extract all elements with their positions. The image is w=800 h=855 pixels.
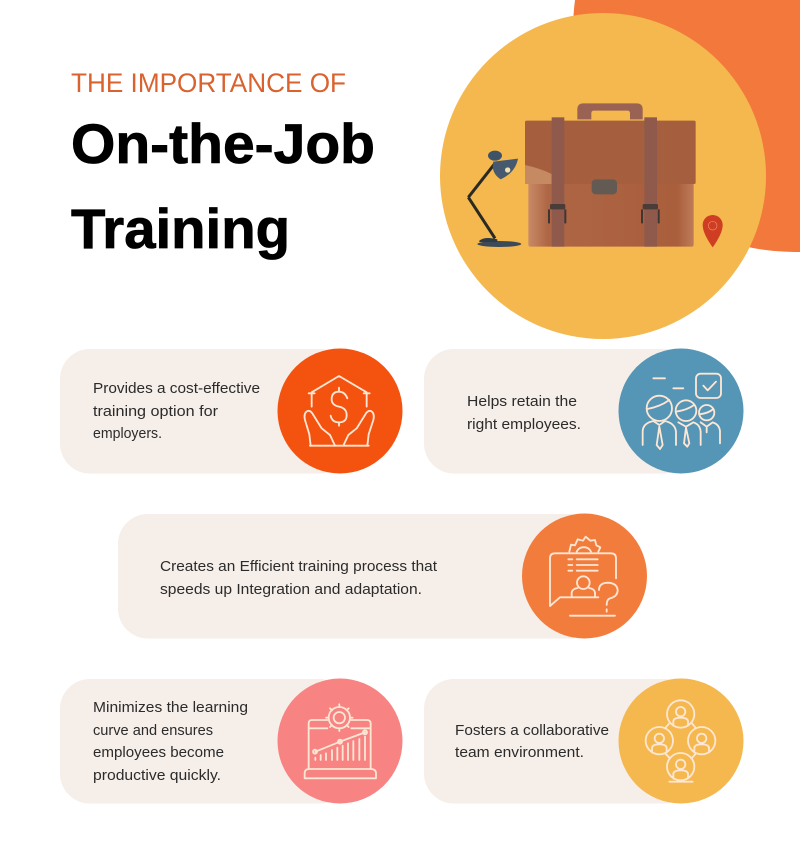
icon: speech bubble with person and question mark <box>550 537 618 616</box>
icon: map pin <box>703 215 723 247</box>
panel: retain employees <box>424 348 744 474</box>
text block <box>93 380 260 442</box>
main title line one: On-the-Job <box>71 112 375 175</box>
text block: right employees. <box>467 416 581 433</box>
text block: speeds up Integration and adaptation. <box>160 581 422 598</box>
text block: Minimizes the learning <box>93 699 248 716</box>
text block: Creates an Efficient training process that <box>160 558 438 575</box>
illustration: briefcase, lamp and pin <box>468 103 723 247</box>
decorative orange circle <box>573 0 800 252</box>
main title line two: Training <box>71 197 290 260</box>
text block <box>93 699 248 784</box>
yellow hero circle <box>440 13 766 339</box>
icon: desk lamp <box>468 151 521 247</box>
text block <box>455 722 609 761</box>
icon: hands and house <box>305 376 374 446</box>
text block: Helps retain the <box>467 393 577 410</box>
text block: employees become <box>93 744 224 761</box>
eyebrow: THE IMPORTANCE OF <box>71 68 346 98</box>
text block <box>160 558 438 598</box>
panel: cost-effective <box>60 348 402 474</box>
icon: briefcase <box>525 103 696 247</box>
text block: curve and ensures <box>93 722 213 739</box>
panel: collaborative team <box>424 678 744 804</box>
text block: training option for <box>93 403 218 420</box>
icon: team and checkbox <box>643 374 721 449</box>
panel: learning curve <box>60 678 402 804</box>
icon: laptop with growth chart <box>305 704 376 778</box>
text block: productive quickly. <box>93 767 221 784</box>
text block: Fosters a collaborative <box>455 722 609 739</box>
text block <box>467 393 581 433</box>
text block: employers. <box>93 425 162 442</box>
text block: team environment. <box>455 744 584 761</box>
panel: efficient process <box>118 514 647 638</box>
heading <box>71 68 375 260</box>
icon: connected people <box>646 700 715 782</box>
text block: Provides a cost-effective <box>93 380 260 397</box>
